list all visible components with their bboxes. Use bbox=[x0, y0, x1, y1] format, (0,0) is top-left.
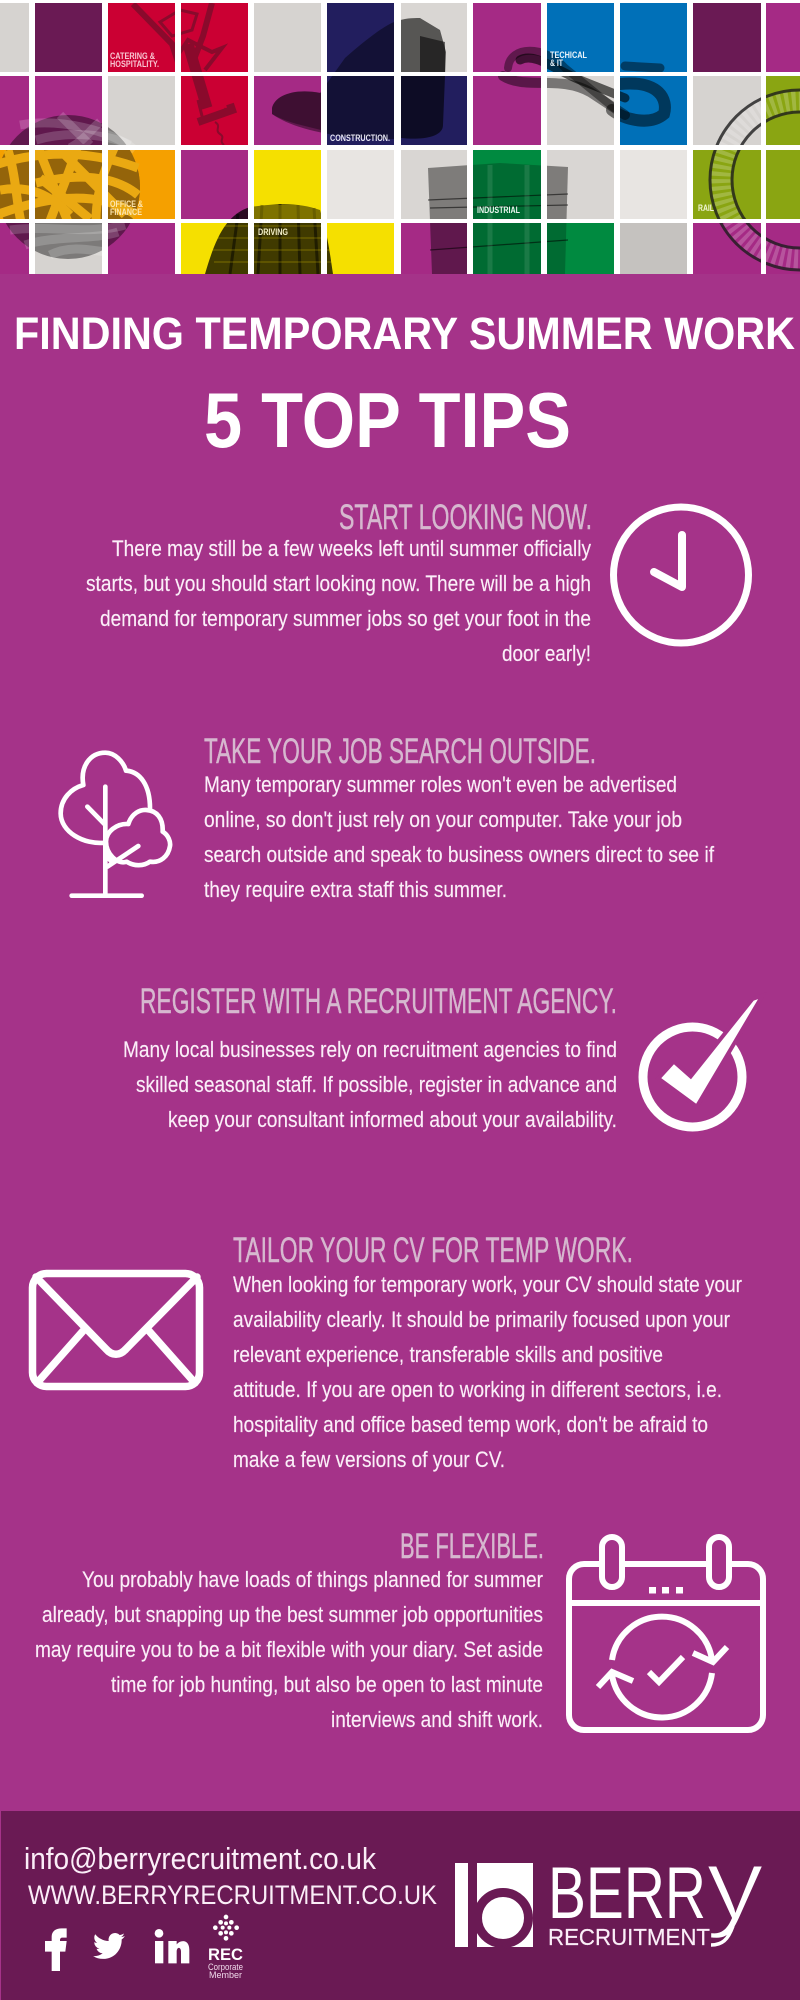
text: tip 2 body bbox=[204, 772, 715, 902]
text: tip 4 body: hospitality and office based temp work, don't be afraid to bbox=[233, 1412, 708, 1437]
text: tip 4 body: relevant experience, transferable skills and positive bbox=[233, 1342, 663, 1367]
text: tip 1 body bbox=[86, 536, 592, 666]
text: tip 2 body: search outside and speak to business owners direct to see if bbox=[204, 842, 715, 867]
text: tip 5 body: may require you to be a bit flexible with your diary. Set aside bbox=[35, 1637, 543, 1662]
tile labels bbox=[110, 50, 714, 237]
tile labels: RAIL bbox=[698, 203, 714, 213]
panel: tip 2 bbox=[61, 731, 715, 902]
photo overlays clipped to the tiles bbox=[0, 3, 800, 274]
text: tip 2 body: online, so don't just rely on your computer. Take your job bbox=[204, 807, 682, 832]
text: tip 3 body: Many local businesses rely on recruitment agencies to find bbox=[123, 1037, 617, 1062]
logo: Berry Recruitment: BERR bbox=[548, 1853, 706, 1934]
tile labels: & IT bbox=[550, 58, 563, 68]
heading: be flexible: BE FLEXIBLE. bbox=[400, 1526, 544, 1566]
footer panel bbox=[1, 1811, 800, 2000]
text: tip 4 body bbox=[233, 1272, 742, 1472]
tile labels: DRIVING bbox=[258, 227, 288, 237]
contact email: info@berryrecruitment.co.uk bbox=[24, 1841, 376, 1876]
tile labels: CONSTRUCTION. bbox=[330, 133, 390, 143]
photo: rubber band ball bbox=[0, 115, 140, 259]
text: tip 2 body: they require extra staff this summer. bbox=[204, 877, 507, 902]
heading: start looking now: START LOOKING NOW. bbox=[339, 497, 592, 537]
panel: tip 5 bbox=[35, 1526, 763, 1732]
text: tip 1 body: door early! bbox=[502, 641, 591, 666]
icon: tree bbox=[61, 753, 170, 896]
text: tip 4 body: make a few versions of your CV. bbox=[233, 1447, 505, 1472]
photo: stacked boxes bbox=[428, 163, 568, 274]
header: sector photo tile grid bbox=[0, 0, 800, 274]
icon: twitter bbox=[93, 1933, 125, 1959]
tile row 1 bbox=[0, 3, 800, 72]
panel: tip 4 bbox=[32, 1230, 742, 1472]
icon: envelope bbox=[32, 1274, 200, 1386]
text: tip 3 body bbox=[123, 1037, 617, 1132]
icon: calendar with refresh arrows bbox=[569, 1537, 763, 1730]
panel: tip 3 bbox=[123, 981, 757, 1132]
tile labels: OFFICE & bbox=[110, 199, 143, 209]
logo: Berry Recruitment: RECRUITMENT bbox=[548, 1924, 710, 1950]
text: tip 1 body: There may still be a few weeks left until summer officially bbox=[112, 536, 592, 561]
panel: tip 1 bbox=[86, 497, 748, 666]
tile labels: FINANCE bbox=[110, 207, 142, 217]
tile labels: HOSPITALITY. bbox=[110, 59, 159, 69]
photo: corkscrew bbox=[133, 3, 232, 145]
logo: Berry Recruitment: y bbox=[706, 1828, 764, 1940]
text: tip 2 body: Many temporary summer roles won't even be advertised bbox=[204, 772, 677, 797]
text: tip 3 body: keep your consultant informed about your availability. bbox=[168, 1107, 617, 1132]
REC corporate member badge: Corporate bbox=[208, 1962, 243, 1973]
icon: tick in circle bbox=[643, 1000, 757, 1127]
text: tip 4 body: attitude. If you are open to working in different sectors, i.e. bbox=[233, 1377, 722, 1402]
tile row 4 bbox=[0, 223, 800, 274]
REC corporate member badge bbox=[208, 1915, 243, 1981]
icon: linkedin bbox=[155, 1929, 189, 1963]
text: tip 3 body: skilled seasonal staff. If possible, register in advance and bbox=[136, 1072, 617, 1097]
tile row 3 bbox=[0, 150, 800, 219]
text: tip 5 body: already, but snapping up the best summer job opportunities bbox=[42, 1602, 543, 1627]
icon: facebook bbox=[45, 1928, 67, 1971]
tile row 2 bbox=[0, 76, 800, 145]
text: tip 5 body bbox=[35, 1567, 543, 1732]
text: tip 1 body: starts, but you should start looking now. There will be a high bbox=[86, 571, 591, 596]
text: tip 5 body: interviews and shift work. bbox=[331, 1707, 543, 1732]
contact website: WWW.BERRYRECRUITMENT.CO.UK bbox=[28, 1880, 437, 1910]
photo: work boot bbox=[272, 18, 446, 139]
tile labels: INDUSTRIAL bbox=[477, 205, 520, 215]
photo: tyre bbox=[205, 204, 334, 274]
icon: clock bbox=[614, 507, 748, 643]
photo: rail track ring bbox=[710, 90, 800, 270]
text: tip 1 body: demand for temporary summer jobs so get your foot in the bbox=[100, 606, 591, 631]
subtitle: 5 TOP TIPS bbox=[204, 376, 571, 464]
tile labels: TECHICAL bbox=[550, 50, 587, 60]
REC corporate member badge: REC bbox=[208, 1945, 243, 1964]
photo: network cable bbox=[503, 51, 665, 121]
tile labels: CATERING & bbox=[110, 51, 155, 61]
logo: Berry Recruitment bbox=[455, 1863, 762, 1947]
text: tip 5 body: time for job hunting, but also be open to last minute bbox=[111, 1672, 543, 1697]
text: tip 5 body: You probably have loads of things planned for summer bbox=[82, 1567, 543, 1592]
REC corporate member badge: Member bbox=[209, 1970, 242, 1981]
